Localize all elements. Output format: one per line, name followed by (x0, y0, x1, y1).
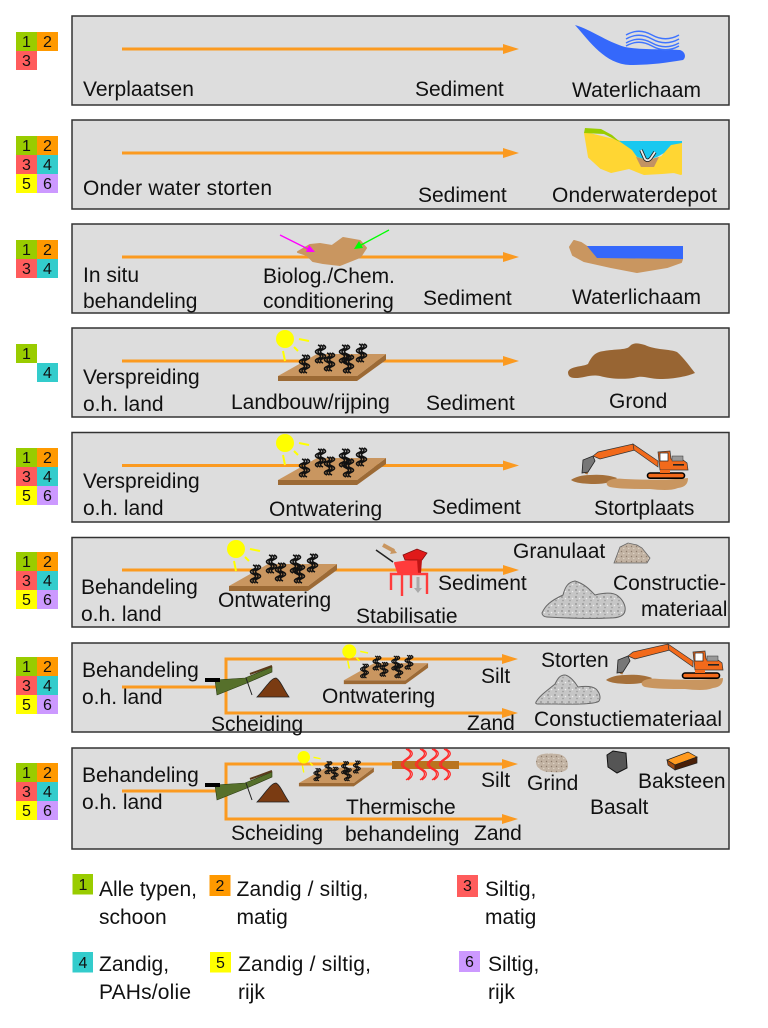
baksteen label: Baksteen (638, 770, 726, 793)
icon: granulate pile (614, 543, 650, 563)
grind label: Grind (527, 772, 578, 795)
badge group row 2: 4 (43, 157, 52, 174)
badge group row 6: 5 (22, 592, 31, 609)
arrow (122, 252, 519, 262)
icon: soil (568, 343, 695, 379)
step label (82, 659, 199, 709)
sediment label: Sediment (415, 78, 504, 101)
panel: In situ behandeling (72, 224, 729, 313)
destination label: Constuctiemateriaal (534, 708, 722, 731)
icon: dewatering field (298, 751, 374, 786)
legend item 4: Zandig, (99, 953, 169, 976)
badge group row 6: 6 (43, 592, 52, 609)
sediment label: Sediment (432, 496, 521, 519)
process label: thermische behandeling: behandeling (345, 823, 459, 846)
process label: ontwatering: Ontwatering (322, 685, 435, 708)
sediment label: Sediment (418, 184, 507, 207)
badge group row 6 (16, 552, 58, 609)
badge group row 2: 1 (22, 138, 31, 155)
badge group row 3: 2 (43, 242, 52, 259)
storten label: Storten (541, 649, 609, 672)
legend item 4 (72, 952, 191, 1004)
legend item 6 (459, 951, 539, 1004)
process label: Biolog./Chem. (263, 265, 395, 288)
legend item 5: 5 (216, 955, 225, 972)
badge group row 3: 1 (22, 242, 31, 259)
legend item 5: rijk (238, 981, 265, 1004)
destination label: Grond (609, 390, 667, 413)
legend item 6: Siltig, (488, 953, 539, 976)
badge group row 4: 1 (22, 346, 31, 363)
process label: thermische behandeling: Thermische (346, 796, 456, 819)
icon: water body section (570, 241, 683, 272)
branching arrows (122, 654, 518, 718)
step label: Verplaatsen (83, 78, 194, 101)
silt label: Silt (481, 665, 510, 688)
step label (81, 576, 198, 626)
step label: behandeling (83, 290, 197, 313)
arrow (122, 356, 519, 366)
badge group row 5 (16, 448, 58, 505)
granulaat label: Granulaat (513, 540, 605, 563)
badge group row 7: 1 (22, 659, 31, 676)
arrow (122, 44, 519, 54)
legend item 3: matig (485, 906, 536, 929)
badge group row 3 (16, 240, 58, 278)
process label: ontwatering: Ontwatering (218, 589, 331, 612)
step label: o.h. land (83, 497, 164, 520)
process label: scheiding: Scheiding (231, 822, 323, 845)
branching arrows (122, 759, 518, 824)
panel: Behandeling, Stabilisatie (72, 538, 729, 628)
legend item 3: Siltig, (485, 878, 536, 901)
badge group row 5: 5 (22, 488, 31, 505)
process label: thermische behandeling (345, 796, 459, 846)
step label: o.h. land (81, 603, 162, 626)
badge group row 7 (16, 657, 58, 714)
badge group row 5: 1 (22, 450, 31, 467)
icon: gravel (536, 753, 568, 772)
badge group row 5: 4 (43, 469, 52, 486)
arrow (122, 460, 519, 470)
silt label: Silt (481, 769, 510, 792)
legend item 6: 6 (465, 954, 474, 971)
destination label: Constructie- (613, 572, 726, 595)
step label: o.h. land (82, 791, 163, 814)
badge group row 3: 3 (22, 261, 31, 278)
badge group row 8: 4 (43, 784, 52, 801)
legend item 1 (72, 874, 197, 929)
badge group row 2: 3 (22, 157, 31, 174)
badge group row 6: 1 (22, 554, 31, 571)
icon: brick (667, 752, 697, 770)
badge group row 6: 4 (43, 573, 52, 590)
step label: In situ (83, 264, 139, 287)
legend item 2 (210, 875, 368, 929)
badge group row 1: 1 (22, 34, 31, 51)
step label: Verspreiding (83, 366, 200, 389)
zand label: Zand (474, 822, 522, 845)
legend item 4: 4 (79, 955, 88, 972)
icon: basalt (607, 751, 627, 773)
step label (83, 366, 200, 416)
icon: excavator (606, 644, 723, 690)
icon: thermal treatment (392, 749, 459, 780)
badge group row 2 (16, 136, 58, 193)
process label: Ontwatering (269, 498, 382, 521)
basalt label: Basalt (590, 796, 649, 819)
legend item 3: 3 (463, 878, 472, 895)
sediment label: Sediment (426, 392, 515, 415)
arrow (122, 565, 519, 575)
badge group row 1: 2 (43, 34, 52, 51)
panel: Behandeling, Thermische behandeling (72, 748, 729, 849)
destination label: Stortplaats (594, 497, 694, 520)
panel: Verspreiding, Ontwatering (72, 432, 729, 522)
zand label: Zand (467, 712, 515, 735)
badge group row 5: 6 (43, 488, 52, 505)
badge group row 4 (16, 344, 58, 382)
legend item 6: rijk (488, 981, 515, 1004)
icon: dewatering field (276, 434, 386, 485)
badge group row 8: 3 (22, 784, 31, 801)
badge group row 7: 5 (22, 697, 31, 714)
step label: o.h. land (82, 686, 163, 709)
legend item 5 (210, 952, 371, 1004)
legend item 1: Alle typen, (99, 878, 197, 901)
process label: Landbouw/rijping (231, 391, 390, 414)
step label (83, 264, 197, 313)
badge group row 2: 6 (43, 176, 52, 193)
legend item 2: Zandig / siltig, (236, 878, 368, 901)
badge group row 7: 2 (43, 659, 52, 676)
badge group row 1 (16, 32, 58, 70)
badge group row 2: 5 (22, 176, 31, 193)
badge group row 2: 2 (43, 138, 52, 155)
process label: scheiding: Scheiding (211, 713, 303, 736)
badge group row 8: 1 (22, 765, 31, 782)
destination label: Waterlichaam (572, 79, 701, 102)
badge group row 7: 3 (22, 678, 31, 695)
icon: dewatering field (342, 644, 428, 684)
process label: conditionering (263, 290, 394, 313)
step label: o.h. land (83, 393, 164, 416)
icon: separator (205, 771, 289, 802)
legend item 1: 1 (79, 877, 88, 894)
badge group row 3: 4 (43, 261, 52, 278)
icon: construction rock (536, 675, 600, 704)
step label (83, 470, 200, 520)
icon: dewatering field (227, 540, 337, 591)
panel: Verspreiding, Landbouw (72, 328, 729, 417)
legend item 2: 2 (216, 878, 225, 895)
legend item 4: PAHs/olie (99, 981, 191, 1004)
icon: sediment conditioning (280, 230, 389, 265)
step label: Onder water storten (83, 177, 272, 200)
panel: Onder water storten (72, 120, 729, 209)
badge group row 8: 6 (43, 803, 52, 820)
step label (82, 764, 199, 814)
badge group row 8: 5 (22, 803, 31, 820)
panel: Verplaatsen (72, 16, 729, 105)
step label: Verspreiding (83, 470, 200, 493)
icon: separator (205, 666, 289, 697)
destination label: materiaal (641, 598, 727, 621)
badge group row 5: 3 (22, 469, 31, 486)
process label: stabilisatie: Stabilisatie (356, 605, 458, 628)
legend item 1: schoon (99, 906, 167, 929)
destination label (613, 572, 727, 621)
icon: construction rock (542, 581, 625, 618)
destination label: Onderwaterdepot (552, 184, 717, 207)
icon: underwater depot (584, 128, 682, 174)
badge group row 7: 6 (43, 697, 52, 714)
badge group row 6: 3 (22, 573, 31, 590)
legend (72, 874, 539, 1004)
badge group row 1: 3 (22, 53, 31, 70)
legend item 2: matig (236, 906, 288, 929)
arrow (122, 148, 519, 158)
badge group row 8 (16, 763, 58, 820)
icon: water body (575, 25, 685, 65)
step label: Behandeling (82, 659, 199, 682)
icon: stabilisation machine (376, 545, 427, 596)
badge group row 4: 4 (43, 365, 52, 382)
icon: excavator (571, 444, 688, 490)
destination label: Waterlichaam (572, 286, 701, 309)
legend item 3 (457, 875, 536, 929)
process label (263, 265, 395, 313)
badge group row 5: 2 (43, 450, 52, 467)
panel: Behandeling, Scheiding, Storten (72, 643, 729, 736)
badge group row 7: 4 (43, 678, 52, 695)
icon: field with plants (276, 330, 386, 381)
step label: Behandeling (82, 764, 199, 787)
sediment label: Sediment (438, 572, 527, 595)
badge group row 8: 2 (43, 765, 52, 782)
step label: Behandeling (81, 576, 198, 599)
badge group row 6: 2 (43, 554, 52, 571)
sediment label: Sediment (423, 287, 512, 310)
legend item 5: Zandig / siltig, (238, 953, 371, 976)
